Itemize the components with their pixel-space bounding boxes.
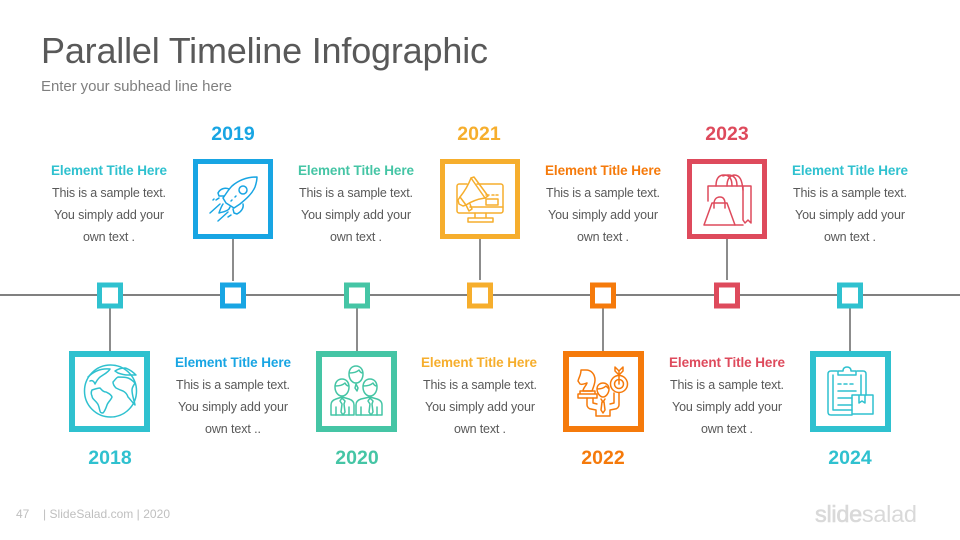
text block: element 6: Element Title Here xyxy=(669,355,785,370)
text block: element 7 xyxy=(792,163,908,244)
icon box 2020 xyxy=(319,354,394,429)
timeline item: 2019 xyxy=(196,123,270,306)
icon: clipboard and box xyxy=(828,367,873,415)
icon box 2019 xyxy=(196,162,270,236)
text block: element 2: You simply add your xyxy=(178,400,288,414)
text block: element 4: You simply add your xyxy=(425,400,535,414)
text block: element 6: This is a sample text. xyxy=(670,378,784,392)
year 2019: 2019 xyxy=(211,123,255,145)
icon box 2021 xyxy=(442,162,518,236)
icon: chess and target xyxy=(578,367,628,416)
text block: element 7: You simply add your xyxy=(795,208,905,222)
footer: source: | SlideSalad.com | 2020 xyxy=(43,507,170,521)
footer: page number: 47 xyxy=(16,507,30,521)
text block: element 3: This is a sample text. xyxy=(299,186,413,200)
text block: element 3: own text . xyxy=(330,230,382,244)
timeline item: 2021 xyxy=(442,123,518,306)
text block: element 5: Element Title Here xyxy=(545,163,661,178)
timeline axis xyxy=(0,294,960,296)
timeline item: 2018 xyxy=(72,285,147,469)
subhead: Enter your subhead line here xyxy=(41,78,232,95)
text block: element 5: You simply add your xyxy=(548,208,658,222)
title: Parallel Timeline Infographic xyxy=(41,30,488,71)
text block: element 5: This is a sample text. xyxy=(546,186,660,200)
icon: globe xyxy=(84,365,136,417)
text block: element 1: You simply add your xyxy=(54,208,164,222)
text block: element 4: own text . xyxy=(454,422,506,436)
node 2024 xyxy=(840,285,860,306)
timeline item: 2022 xyxy=(566,285,641,469)
timeline item: 2020 xyxy=(319,285,394,469)
node 2018 xyxy=(100,285,120,306)
text block: element 7: Element Title Here xyxy=(792,163,908,178)
text block: element 1: This is a sample text. xyxy=(52,186,166,200)
text block: element 3 xyxy=(298,163,414,244)
timeline item: 2023 xyxy=(690,123,764,306)
text block: element 2: Element Title Here xyxy=(175,355,291,370)
text block: element 2: This is a sample text. xyxy=(176,378,290,392)
node 2023 xyxy=(716,285,738,306)
node 2022 xyxy=(592,285,614,306)
text block: element 6: You simply add your xyxy=(672,400,782,414)
year 2018: 2018 xyxy=(88,447,132,469)
text block: element 6: own text . xyxy=(701,422,753,436)
icon box 2022 xyxy=(566,354,641,429)
timeline item: 2024 xyxy=(813,285,888,469)
year 2021: 2021 xyxy=(457,123,501,145)
text block: element 1 xyxy=(51,163,167,244)
text block: element 3: Element Title Here xyxy=(298,163,414,178)
icon: rocket xyxy=(210,177,257,221)
text block: element 2: own text .. xyxy=(205,422,261,436)
text block: element 1: own text . xyxy=(83,230,135,244)
text block: element 4: Element Title Here xyxy=(421,355,537,370)
year 2020: 2020 xyxy=(335,447,379,469)
icon box 2024 xyxy=(813,354,888,429)
year 2024: 2024 xyxy=(828,447,872,469)
text block: element 7: own text . xyxy=(824,230,876,244)
text block: element 5 xyxy=(545,163,661,244)
year 2023: 2023 xyxy=(705,123,749,145)
text block: element 7: This is a sample text. xyxy=(793,186,907,200)
year 2022: 2022 xyxy=(581,447,625,469)
node 2020 xyxy=(346,285,368,306)
text block: element 6 xyxy=(669,355,785,436)
icon: team xyxy=(331,366,382,415)
logo wordmark: slidesalad xyxy=(815,501,917,527)
node 2019 xyxy=(222,285,244,306)
icon: monitor with megaphone xyxy=(457,177,503,222)
icon: shopping bags xyxy=(704,175,751,225)
text block: element 4: This is a sample text. xyxy=(423,378,537,392)
node 2021 xyxy=(470,285,490,306)
icon box 2023 xyxy=(690,162,764,236)
text block: element 2 xyxy=(175,355,291,436)
text block: element 5: own text . xyxy=(577,230,629,244)
icon box 2018 xyxy=(72,354,147,429)
text block: element 4 xyxy=(421,355,537,436)
text block: element 3: You simply add your xyxy=(301,208,411,222)
text block: element 1: Element Title Here xyxy=(51,163,167,178)
